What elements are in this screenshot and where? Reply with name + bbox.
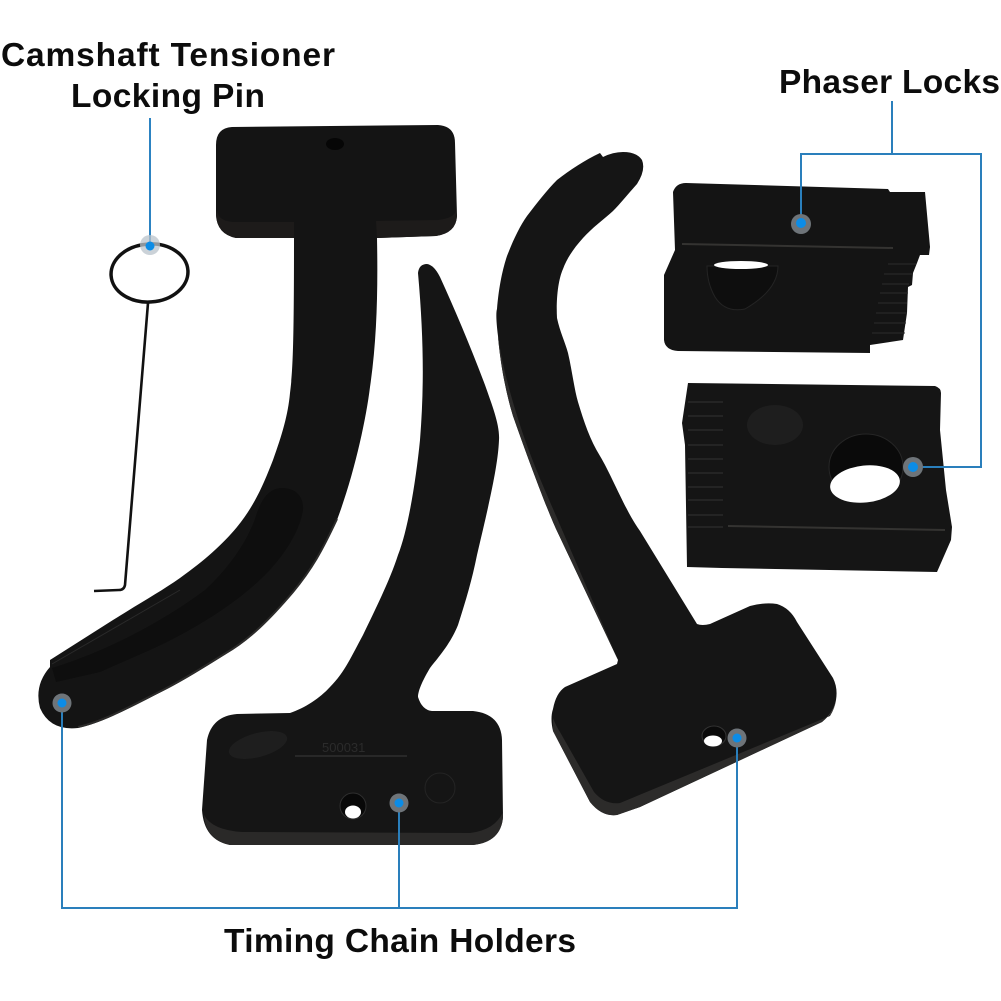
detail: scuffed texture xyxy=(226,726,290,764)
detail: curved groove xyxy=(52,488,303,682)
detail: edge bevel xyxy=(498,336,618,660)
detail: lower shelf highlight xyxy=(728,525,945,531)
timing chain holder: left xyxy=(38,125,457,728)
detail: small hole xyxy=(340,793,366,819)
detail: lower bevel xyxy=(553,700,836,815)
text: molded code: 500031 xyxy=(322,740,365,755)
label: phaser locks: Phaser Locks xyxy=(779,64,1000,101)
label: camshaft tensioner locking pin: Locking Pin xyxy=(71,78,265,115)
timing chain holder: right xyxy=(496,152,837,815)
detail: scuffed texture xyxy=(747,405,803,445)
detail: upper shelf highlight xyxy=(682,243,893,249)
detail: plate bevel xyxy=(216,210,457,238)
detail: round ejector mark xyxy=(425,773,455,803)
detail: ribbed end xyxy=(872,264,916,333)
label: timing chain holders: Timing Chain Holders xyxy=(224,923,576,960)
detail: ridge highlight xyxy=(52,590,180,664)
detail: through hole xyxy=(828,434,903,506)
icon: camshaft tensioner locking pin xyxy=(94,241,190,591)
label: camshaft tensioner locking pin: Camshaft Tensioner xyxy=(1,37,335,74)
detail: plate bevel xyxy=(204,812,503,845)
detail: lower edge bevel xyxy=(78,519,337,727)
timing chain holder: middle xyxy=(202,264,503,845)
detail: top plate hole xyxy=(326,138,344,150)
phaser lock: top xyxy=(664,183,930,353)
callout: camshaft pin leader xyxy=(140,118,160,255)
phaser lock: bottom xyxy=(682,383,952,572)
detail: ribbed end xyxy=(688,402,723,527)
callout: phaser locks leader xyxy=(791,101,981,477)
callout: timing chain holders leader xyxy=(52,694,746,908)
detail: molded marking line xyxy=(295,755,407,757)
detail: keyhole xyxy=(702,726,726,746)
label: camshaft tensioner locking pin xyxy=(1,37,335,115)
detail: through hole xyxy=(707,261,778,310)
